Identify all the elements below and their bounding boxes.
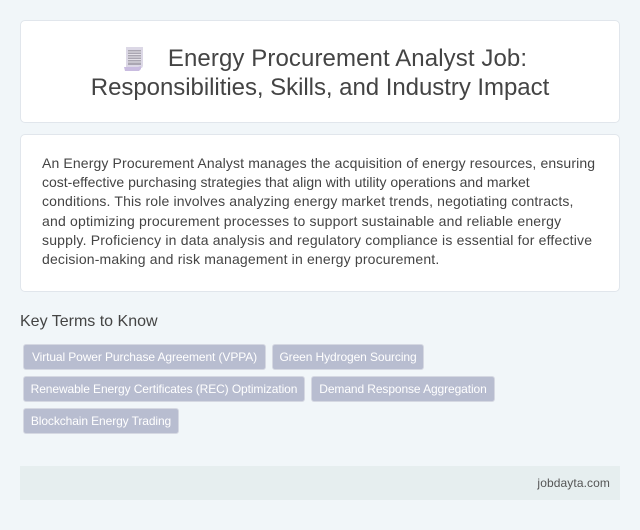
tag: demand response: Demand Response Aggregation (319, 382, 487, 396)
description text: supply. Proficiency in data analysis and regulatory compliance is essential for effective (42, 232, 592, 248)
description text: and optimizing procurement processes to support sustainable and reliable energy (42, 213, 561, 229)
description text: decision-making and risk management in energy procurement. (42, 251, 439, 267)
description text: An Energy Procurement Analyst manages the acquisition of energy resources, ensuring (42, 155, 595, 171)
title: Responsibilities, Skills, and Industry Impact (91, 74, 549, 101)
tag: REC optimization: Renewable Energy Certificates (REC) Optimization (31, 382, 297, 396)
title: Energy Procurement Analyst Job: (168, 45, 527, 72)
footer bar (20, 466, 620, 500)
icon: document scroll (124, 47, 143, 71)
tag: VPPA (23, 344, 266, 370)
tag: blockchain (23, 408, 179, 434)
tag list (23, 344, 495, 434)
tag: green hydrogen: Green Hydrogen Sourcing (279, 350, 417, 364)
footer credit: jobdayta.com (537, 476, 610, 490)
description text (42, 155, 595, 267)
tag: blockchain: Blockchain Energy Trading (31, 414, 171, 428)
tag: green hydrogen (272, 344, 424, 370)
description panel (20, 134, 620, 292)
tag: demand response (311, 376, 495, 402)
title (91, 45, 550, 101)
tag: VPPA: Virtual Power Purchase Agreement (VPPA) (32, 350, 257, 364)
tag: REC optimization (23, 376, 305, 402)
description text: conditions. This role involves analyzing energy market trends, negotiating contracts, (42, 193, 574, 209)
key terms heading: Key Terms to Know (20, 313, 158, 330)
header panel (20, 20, 620, 123)
description text: cost-effective purchasing strategies that align with utility operations and market (42, 174, 530, 190)
